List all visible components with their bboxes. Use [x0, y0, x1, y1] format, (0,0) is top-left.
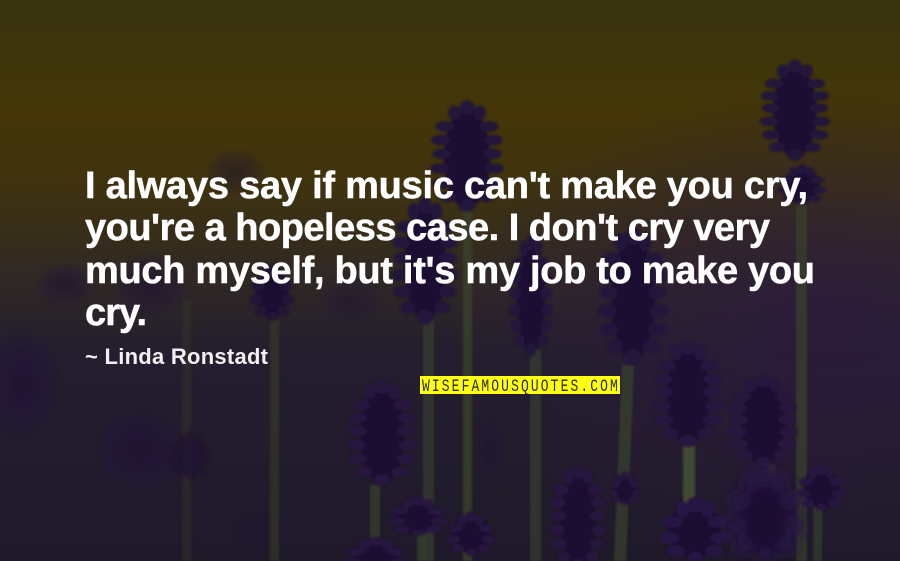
flower: right middle: [653, 341, 723, 447]
flower: bottom centre: [344, 465, 640, 561]
quote text: you're a hopeless case. I don't cry very: [85, 207, 770, 249]
author attribution: ~ Linda Ronstadt: [85, 344, 269, 369]
flower: bottom right: [659, 464, 807, 561]
flower: above watermark: [598, 226, 668, 364]
quote text: I always say if music can't make you cry,: [85, 165, 808, 207]
blurred background flowers: [0, 147, 505, 560]
flower stems: [182, 200, 822, 561]
quote text: much myself, but it's my job to make you: [85, 250, 815, 292]
flower: centre top: [430, 100, 504, 212]
flower: centre right: [509, 235, 553, 357]
flower: lower centre: [347, 380, 417, 486]
flower: far right middle: [728, 375, 798, 467]
flower: lower left: [169, 431, 211, 479]
quote text: [85, 165, 815, 334]
flower: right edge: [796, 464, 846, 510]
flower: left of centre: [250, 264, 294, 320]
quote text: cry.: [85, 292, 147, 334]
lavender flower heads: [169, 60, 846, 561]
flower: centre: [392, 197, 458, 324]
flower: top right: [760, 60, 830, 205]
watermark badge: WISEFAMOUSQUOTES.COM: [422, 376, 618, 397]
